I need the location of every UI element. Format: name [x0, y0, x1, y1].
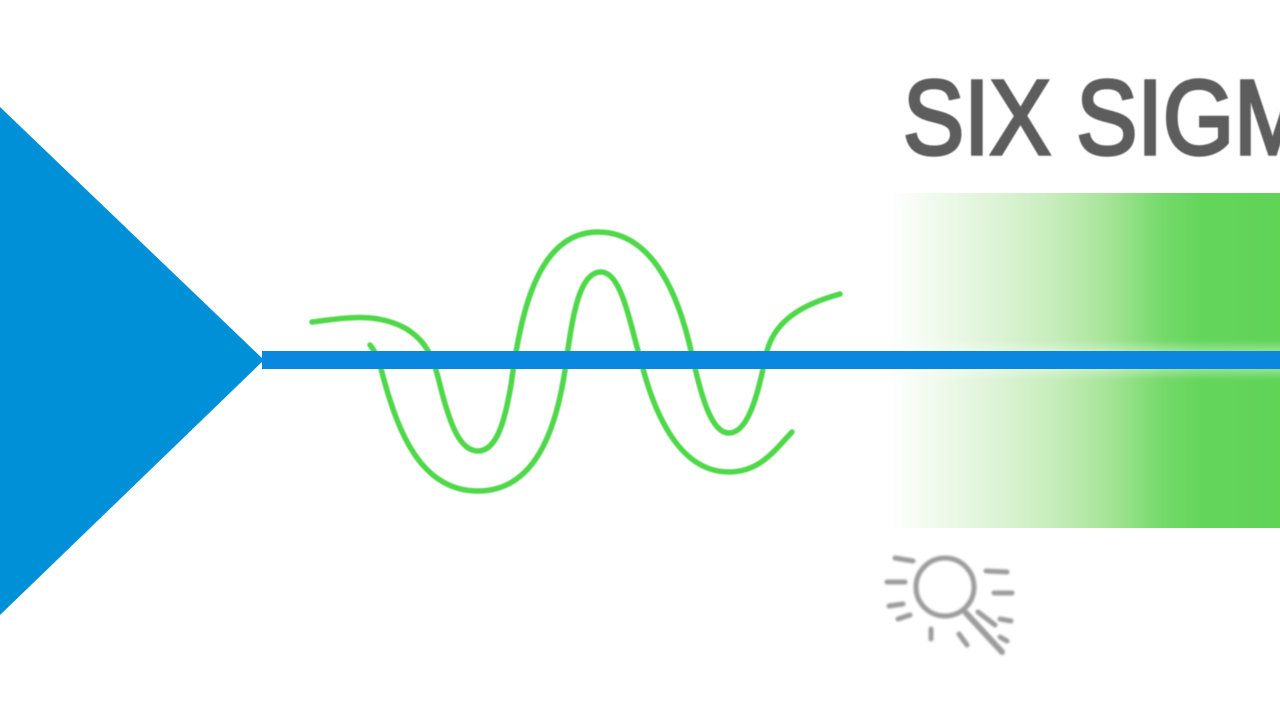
green gradient band [890, 193, 1280, 528]
blue triangle [0, 107, 264, 615]
icon: magnifying glass [887, 558, 1012, 652]
blue centre line [262, 351, 1280, 369]
green wave: outer curves [312, 232, 840, 491]
